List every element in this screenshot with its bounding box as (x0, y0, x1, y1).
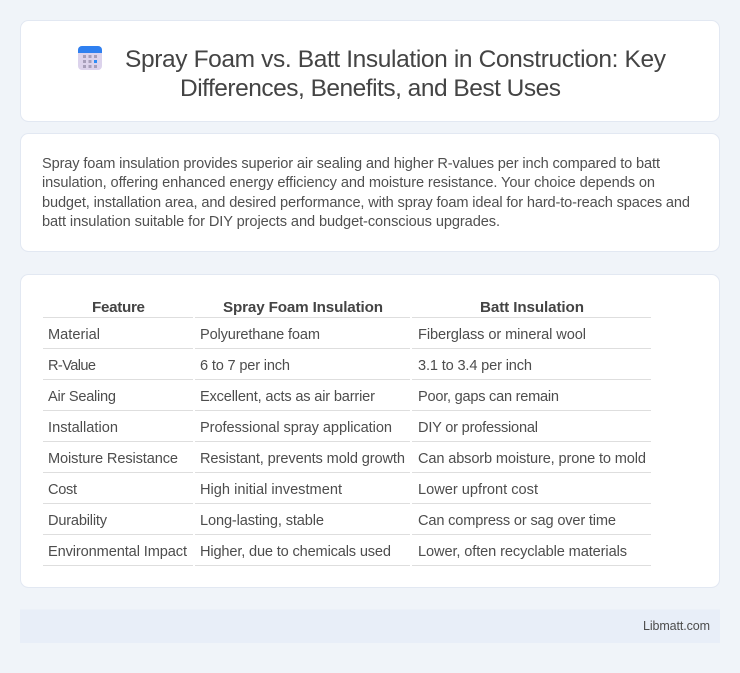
row: installation: DIY or professional (418, 420, 538, 436)
row: moisture resistance (48, 451, 646, 467)
row: installation (48, 420, 538, 436)
panel: introduction text: Spray foam insulation provides superior air sealing and higher R-values per inch compared to batt (42, 156, 660, 172)
row: r-value: R-Value (48, 358, 96, 374)
footer (20, 610, 720, 643)
title: Spray Foam vs. Batt Insulation in Construction: Key (125, 46, 667, 73)
row: durability (48, 513, 616, 529)
row: moisture resistance: Resistant, prevents mold growth (200, 451, 405, 467)
panel: introduction text (20, 134, 720, 252)
table header: Batt Insulation (480, 299, 584, 316)
table header: Feature (92, 299, 145, 316)
table header (92, 299, 584, 316)
row: environmental impact: Higher, due to chemicals used (200, 544, 391, 560)
icon: calendar (78, 46, 102, 70)
panel: introduction text: batt insulation suitable for DIY projects and budget-conscious upgrades. (42, 214, 500, 230)
row: air sealing: Poor, gaps can remain (418, 389, 559, 405)
title (125, 46, 667, 102)
row: air sealing: Air Sealing (48, 389, 116, 405)
row: cost (48, 482, 538, 498)
panel: title header (20, 20, 720, 122)
row: material: Polyurethane foam (200, 327, 320, 343)
row: r-value: 3.1 to 3.4 per inch (418, 358, 532, 374)
row: durability: Long-lasting, stable (200, 513, 324, 529)
row: installation: Installation (48, 420, 118, 436)
footer: Libmatt.com (643, 619, 710, 633)
panel: introduction text: budget, installation area, and desired performance, with spray foam ideal for hard-to-reach spaces and (42, 195, 690, 211)
row: environmental impact: Lower, often recyclable materials (418, 544, 627, 560)
row: r-value (48, 358, 532, 374)
row: cost: Lower upfront cost (418, 482, 538, 498)
row: moisture resistance: Moisture Resistance (48, 451, 178, 467)
row: r-value: 6 to 7 per inch (200, 358, 290, 374)
row: durability: Durability (48, 513, 108, 529)
table header: Spray Foam Insulation (223, 299, 383, 316)
title: Differences, Benefits, and Best Uses (180, 75, 561, 102)
row: cost: High initial investment (200, 482, 342, 498)
row: material (48, 327, 586, 343)
panel: introduction text: insulation, offering enhanced energy efficiency and moisture resistance. Your choice depends on (42, 175, 655, 191)
row: material: Fiberglass or mineral wool (418, 327, 586, 343)
panel: comparison table (20, 274, 720, 588)
row: air sealing (48, 389, 559, 405)
row: durability: Can compress or sag over time (418, 513, 616, 529)
row: environmental impact (48, 544, 627, 560)
row: moisture resistance: Can absorb moisture, prone to mold (418, 451, 646, 467)
row: material: Material (48, 327, 100, 343)
row: cost: Cost (48, 482, 77, 498)
row: installation: Professional spray application (200, 420, 392, 436)
row: air sealing: Excellent, acts as air barrier (200, 389, 375, 405)
row: environmental impact: Environmental Impact (48, 544, 187, 560)
